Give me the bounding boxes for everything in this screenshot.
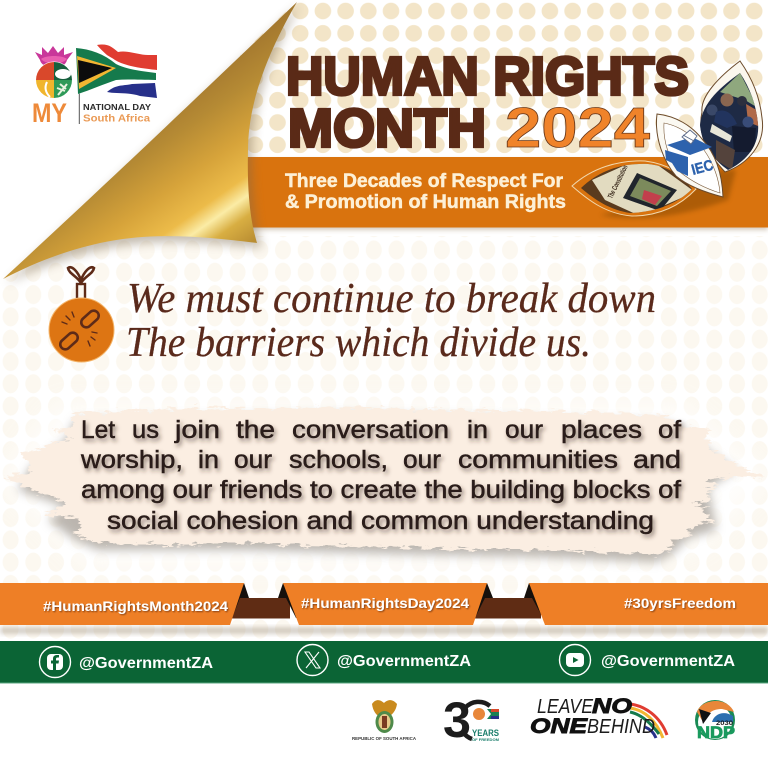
logo: leave no one behind — [530, 695, 667, 738]
brush stroke panel — [5, 407, 765, 555]
YouTube handle — [560, 644, 735, 676]
BEHIND: BEHIND — [587, 716, 655, 738]
handwritten quote — [126, 276, 656, 366]
line 2: and — [633, 446, 681, 474]
numeral 3: 3 — [443, 692, 471, 748]
subtitle text — [285, 170, 566, 213]
hashtags: #HumanRightsMonth2024 — [43, 598, 228, 614]
title: HUMAN RIGHTS — [286, 46, 689, 106]
body text — [80, 416, 681, 535]
background: faint dot pattern — [0, 236, 768, 641]
white haze around brush stroke — [0, 405, 768, 565]
NO: NO — [592, 695, 632, 718]
NDP label: NDP — [697, 723, 735, 742]
line 2: in — [198, 446, 219, 474]
logo: Mpumalanga youth emblem and national day flag — [32, 44, 157, 128]
book title: The Constitution — [606, 163, 630, 200]
hashtags: #30yrsFreedom — [624, 595, 736, 611]
line 1: join — [174, 416, 220, 444]
ribbon segment right — [529, 583, 768, 625]
ribbon segment centre — [283, 583, 487, 625]
brush stroke shadow — [18, 414, 736, 562]
South Africa label: South Africa — [83, 114, 150, 124]
gold fold shadow — [6, 4, 300, 284]
icon: South African flag — [76, 44, 157, 98]
YEARS caption: YEARS — [472, 728, 499, 739]
handwritten quote: We must continue to break down — [127, 276, 656, 322]
line 1: places — [561, 416, 642, 444]
logo: coat of arms — [352, 700, 416, 742]
line 1: of — [658, 416, 681, 444]
hashtag ribbon — [0, 583, 768, 625]
line 2 — [80, 446, 681, 474]
facebook handle — [40, 646, 213, 678]
ribbon segment left — [0, 583, 244, 625]
book cover picture — [623, 173, 677, 211]
line 1: conversation — [292, 416, 449, 444]
YouTube handle: @GovernmentZA — [601, 653, 735, 670]
MY lettering: MY — [32, 98, 67, 128]
IEC label: IEC — [690, 157, 715, 179]
line 1: in — [467, 416, 488, 444]
subtitle text: & Promotion of Human Rights — [285, 191, 566, 213]
line 1 — [81, 416, 681, 444]
broken chain links — [58, 309, 101, 351]
line 2: communities — [458, 446, 618, 474]
icon: ballot box — [667, 137, 712, 155]
ribbon connectors — [229, 583, 546, 618]
ONE: ONE — [530, 715, 588, 738]
line 2: worship, — [80, 446, 183, 474]
panel: orange subtitle band — [246, 157, 768, 228]
line 3: among our friends to create the building blocks of — [81, 476, 681, 504]
subtitle text: Three Decades of Respect For — [285, 170, 563, 192]
hashtags — [43, 595, 736, 614]
hashtags: #HumanRightsDay2024 — [301, 595, 469, 611]
leaf: crowd photo — [698, 61, 763, 172]
logo: 30 years of freedom — [443, 692, 500, 748]
leaf shadow — [600, 170, 736, 218]
handwritten quote: The barriers which divide us. — [126, 320, 591, 366]
numeral 0 ring — [463, 702, 490, 739]
X handle — [297, 644, 471, 676]
icon: provincial shield — [36, 62, 72, 98]
LEAVE: LEAVE — [537, 696, 594, 718]
logo: NDP 2030 — [695, 700, 735, 742]
2030 label: 2030 — [716, 720, 733, 727]
coat of arms caption: REPUBLIC OF SOUTH AFRICA — [352, 736, 416, 742]
NATIONAL DAY label: NATIONAL DAY — [83, 102, 152, 112]
orange subtitle band shadow — [246, 160, 768, 230]
line 1: us — [132, 416, 159, 444]
hashtag ribbon shadow — [0, 627, 768, 634]
small flag — [473, 708, 499, 720]
leaf images: constitution book, IEC ballot box and crowd photo — [572, 61, 763, 218]
title: MONTH — [288, 98, 486, 158]
medallion disc — [49, 298, 114, 362]
leaf: constitution book — [572, 160, 696, 218]
facebook handle: @GovernmentZA — [79, 655, 213, 672]
white corner behind the page fold — [0, 0, 298, 282]
background: header dot pattern — [240, 0, 768, 158]
flag pole — [79, 92, 80, 124]
OF FREEDOM caption: OF FREEDOM — [472, 737, 500, 742]
X handle: @GovernmentZA — [337, 653, 471, 670]
swoosh — [630, 704, 667, 738]
gold page fold — [3, 2, 297, 279]
line 1: Let — [81, 416, 115, 444]
title: 2024 — [505, 96, 650, 160]
line 2: schools, — [289, 446, 388, 474]
panel: green social media band — [0, 641, 768, 684]
line 4: social cohesion and common understanding — [107, 507, 654, 535]
line 2: our — [403, 446, 441, 474]
line 2: our — [234, 446, 272, 474]
line 1: our — [505, 416, 543, 444]
leaf: IEC ballot box — [656, 114, 723, 197]
icon: thistle — [35, 46, 73, 68]
ribbon — [68, 267, 94, 299]
title — [286, 46, 689, 160]
line 1: the — [236, 416, 275, 444]
icon: broken chain medallion — [49, 267, 114, 362]
